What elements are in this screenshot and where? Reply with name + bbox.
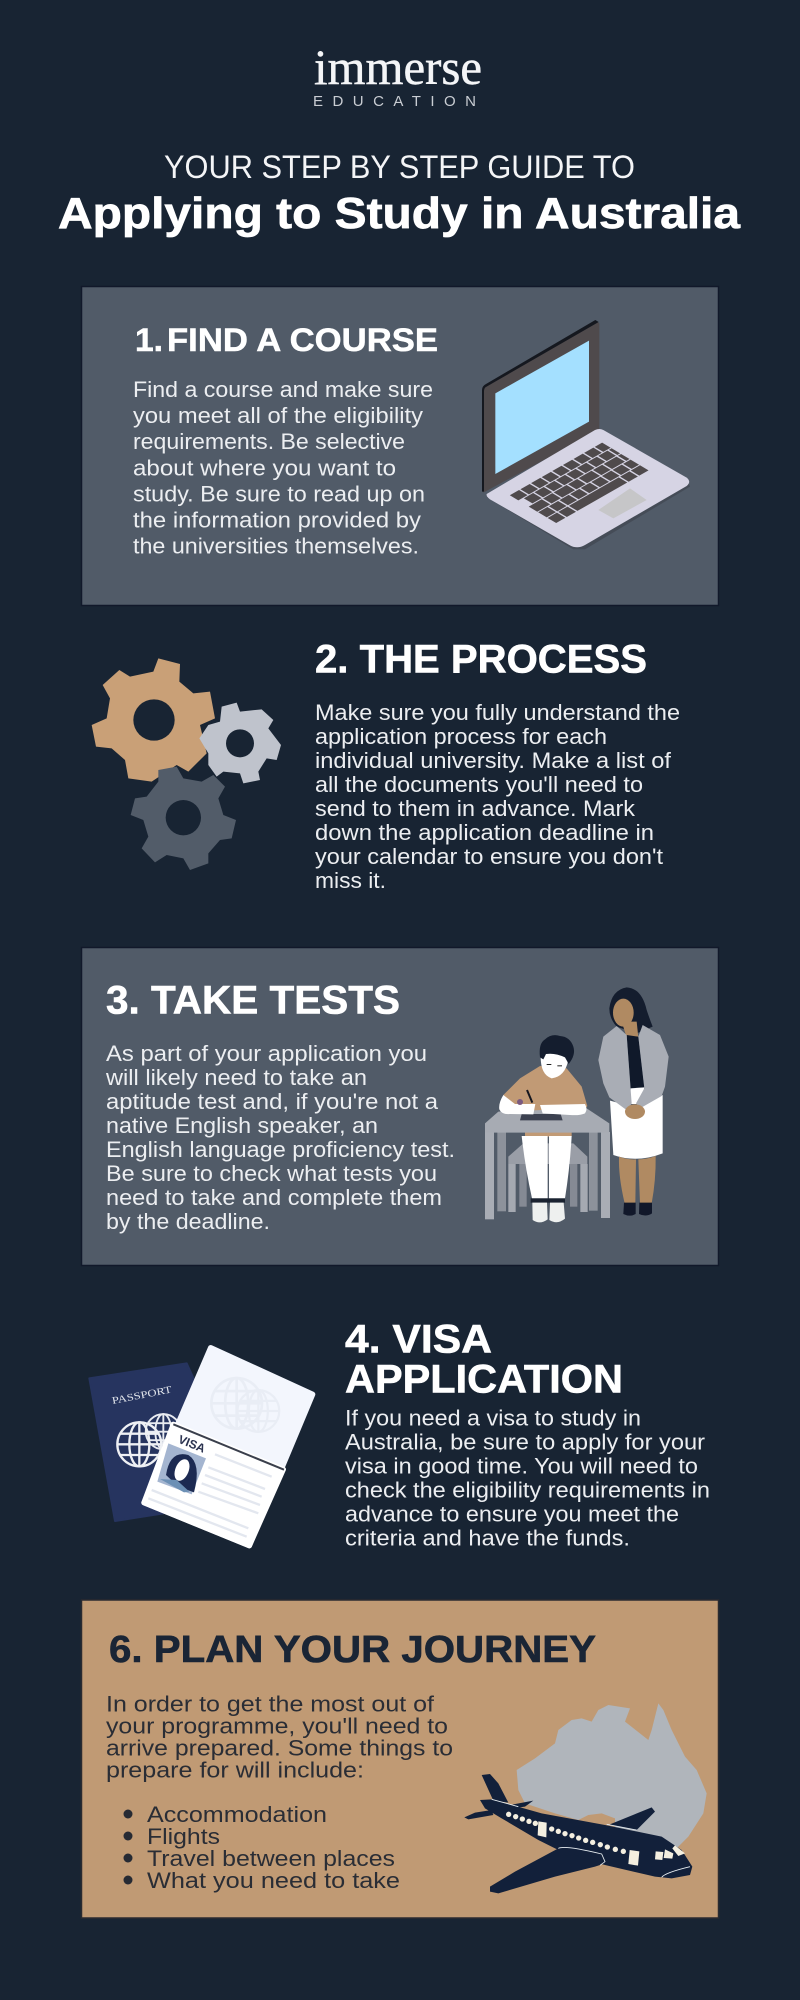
body text: step 3: by the deadline. xyxy=(106,1209,270,1234)
body text: step 6: your programme, you'll need to xyxy=(106,1714,448,1738)
list: things to prepare: What you need to take xyxy=(147,1868,400,1893)
title: YOUR STEP BY STEP GUIDE TO xyxy=(164,149,635,185)
body text: step 2: individual university. Make a list of xyxy=(315,748,672,773)
chair xyxy=(508,1143,588,1212)
body text: step 1: you meet all of the eligibility xyxy=(133,403,423,428)
body text: step 3: need to take and complete them xyxy=(106,1185,442,1210)
body text: step 1: about where you want to xyxy=(133,456,396,480)
plane xyxy=(464,1774,692,1893)
body text: step 6: prepare for will include: xyxy=(106,1758,364,1782)
heading: step 2: 2. THE PROCESS xyxy=(315,638,647,682)
body text: step 1: study. Be sure to read up on xyxy=(133,482,425,506)
body text: step 2: your calendar to ensure you don't xyxy=(315,844,663,869)
body text: step 1: the universities themselves. xyxy=(133,534,419,558)
icon: laptop xyxy=(482,320,690,549)
body text: step 2: application process for each xyxy=(315,724,607,749)
heading: step 4: 4. VISA xyxy=(345,1318,492,1362)
title xyxy=(58,149,741,238)
teacher xyxy=(598,987,669,1216)
list: things to prepare: Accommodation xyxy=(147,1802,327,1827)
logo: immerse education: EDUCATION xyxy=(313,93,476,110)
list: things to prepare xyxy=(124,1802,400,1893)
body text: step 2: send to them in advance. Mark xyxy=(315,796,636,821)
body text: step 1: the information provided by xyxy=(133,508,421,532)
panel: step 1 find a course xyxy=(82,286,718,606)
table top and paper xyxy=(485,1108,609,1133)
body text: step 2: all the documents you'll need to xyxy=(315,772,643,797)
body text: step 1 xyxy=(133,377,433,558)
body text: step 3: will likely need to take an xyxy=(105,1065,367,1090)
body text: step 1: requirements. Be selective xyxy=(133,429,405,454)
body text: step 4: If you need a visa to study in xyxy=(345,1406,641,1430)
passport cover xyxy=(89,1363,195,1521)
body text: step 6: arrive prepared. Some things to xyxy=(106,1736,453,1760)
body text: step 3 xyxy=(105,1041,455,1234)
body text: step 2: miss it. xyxy=(315,868,386,893)
body text: step 4: advance to ensure you meet the xyxy=(345,1502,679,1526)
body text: step 2 xyxy=(315,700,680,893)
body text: step 4 xyxy=(345,1406,710,1550)
passport cover: PASSPORT xyxy=(111,1385,173,1407)
body text: step 2: Make sure you fully understand the xyxy=(315,700,680,725)
map: australia xyxy=(517,1703,707,1853)
panel: step 3 take tests xyxy=(82,948,718,1266)
body text: step 3: As part of your application you xyxy=(106,1041,427,1066)
body text: step 3: Be sure to check what tests you xyxy=(106,1161,437,1186)
icon: gears xyxy=(92,658,281,870)
illustration: plane over australia xyxy=(464,1703,707,1893)
icon: dark gear xyxy=(131,767,236,870)
panel: step 2 the process xyxy=(92,638,680,893)
body text: step 4: check the eligibility requirements in xyxy=(345,1478,710,1502)
heading: step 4 xyxy=(345,1318,623,1402)
heading: step 4: APPLICATION xyxy=(345,1358,623,1402)
heading: step 6: 6. PLAN YOUR JOURNEY xyxy=(109,1629,596,1671)
visa page: VISA xyxy=(176,1432,208,1456)
icon: light gear xyxy=(199,703,281,783)
body text: step 4: visa in good time. You will need to xyxy=(345,1454,698,1478)
body text: step 4: criteria and have the funds. xyxy=(345,1526,630,1550)
list: things to prepare: Travel between places xyxy=(147,1846,395,1871)
body text: step 1: Find a course and make sure xyxy=(133,377,433,402)
body text: step 2: down the application deadline in xyxy=(315,820,654,845)
visa page xyxy=(144,1348,313,1546)
heading: step 3: 3. TAKE TESTS xyxy=(106,978,400,1022)
panel: step 6 plan your journey xyxy=(82,1600,718,1918)
body text: step 3: native English speaker, an xyxy=(106,1113,378,1138)
student legs and torso xyxy=(503,1066,587,1222)
illustration: student and teacher xyxy=(485,987,669,1222)
icon: passport and visa xyxy=(89,1348,313,1546)
heading: step 1: 1. xyxy=(135,322,163,358)
body text: step 6: In order to get the most out of xyxy=(106,1692,435,1716)
body text: step 4: Australia, be sure to apply for your xyxy=(345,1430,705,1454)
icon: tan gear xyxy=(92,658,215,782)
body text: step 3: aptitude test and, if you're not a xyxy=(106,1089,439,1114)
body text: step 3: English language proficiency test. xyxy=(106,1137,455,1162)
panel: step 4 visa application xyxy=(89,1318,710,1550)
table legs xyxy=(485,1132,610,1219)
heading: step 1: FIND A COURSE xyxy=(167,322,438,358)
student arms and head xyxy=(499,1035,586,1115)
body text: step 6 xyxy=(106,1692,453,1782)
title: Applying to Study in Australia xyxy=(58,189,741,238)
logo: immerse education: immerse xyxy=(314,39,482,95)
list: things to prepare: Flights xyxy=(147,1824,220,1849)
